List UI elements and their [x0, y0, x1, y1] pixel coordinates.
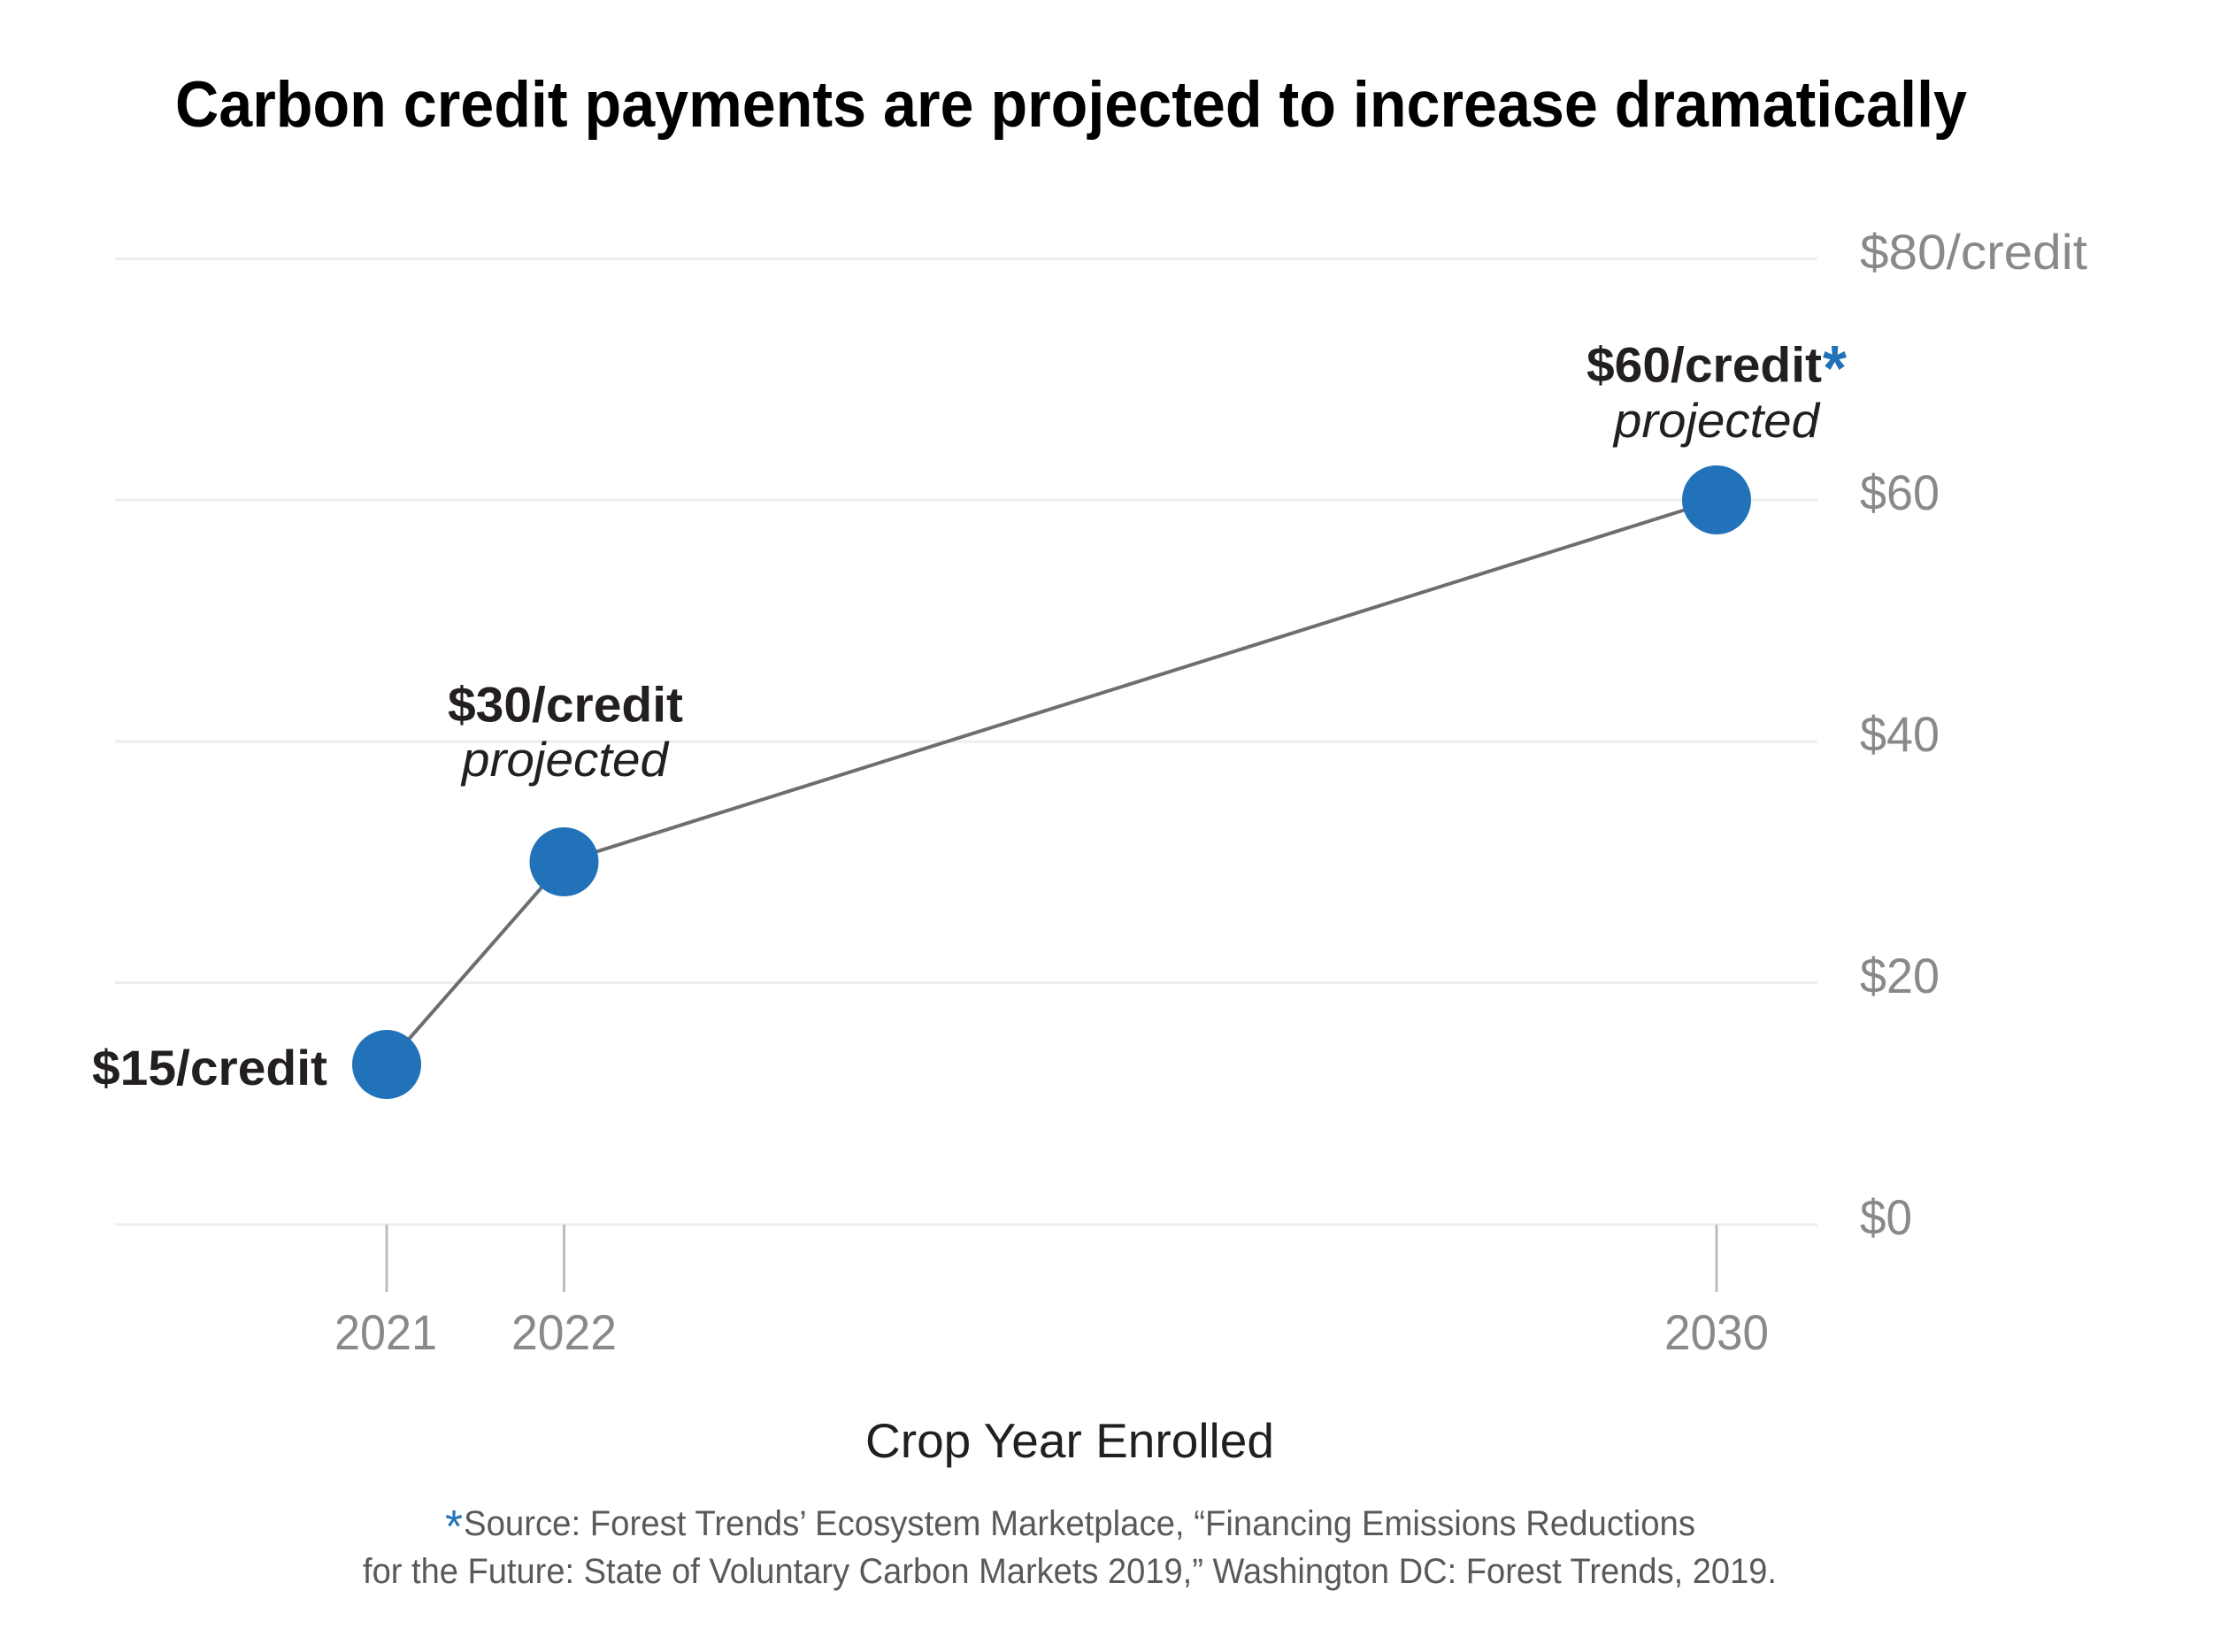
label: $15/credit: $15/credit [92, 1040, 327, 1095]
y axis labels: $20 [1860, 948, 1940, 1003]
x axis year labels: 2021 [334, 1304, 437, 1360]
label: $60/credit projected [1586, 334, 1847, 448]
x axis ticks [387, 1225, 1717, 1292]
label: $60/credit projected: $60/credit [1586, 336, 1822, 393]
x axis title: Crop Year Enrolled [865, 1413, 1274, 1468]
y axis labels: $80/credit [1860, 224, 2087, 280]
source footnote: * [445, 1502, 463, 1553]
x axis year labels: 2030 [1664, 1304, 1769, 1360]
y axis labels [1860, 224, 2087, 1245]
label: $60/credit projected: * [1823, 334, 1847, 404]
label: $60/credit projected: projected [1612, 393, 1821, 448]
x axis year labels: 2022 [511, 1304, 617, 1360]
title: Carbon credit payments are projected to increase dramatically [175, 69, 1967, 141]
x axis year labels [334, 1304, 1769, 1360]
source footnote: for the Future: State of Voluntary Carbon Markets 2019,” Washington DC: Forest Trends, 2019. [363, 1552, 1777, 1591]
y axis labels: $40 [1860, 706, 1940, 762]
source footnote: Source: Forest Trends’ Ecosystem Marketplace, “Financing Emissions Reductions [464, 1504, 1695, 1543]
y axis labels: $60 [1860, 465, 1940, 520]
label: $30/credit projected [448, 676, 683, 787]
label: $30/credit projected: $30/credit [448, 676, 683, 733]
line series [387, 500, 1717, 1064]
y axis labels: $0 [1860, 1189, 1912, 1245]
label: $30/credit projected: projected [460, 732, 670, 787]
data points [352, 465, 1751, 1099]
source footnote [363, 1502, 1777, 1591]
